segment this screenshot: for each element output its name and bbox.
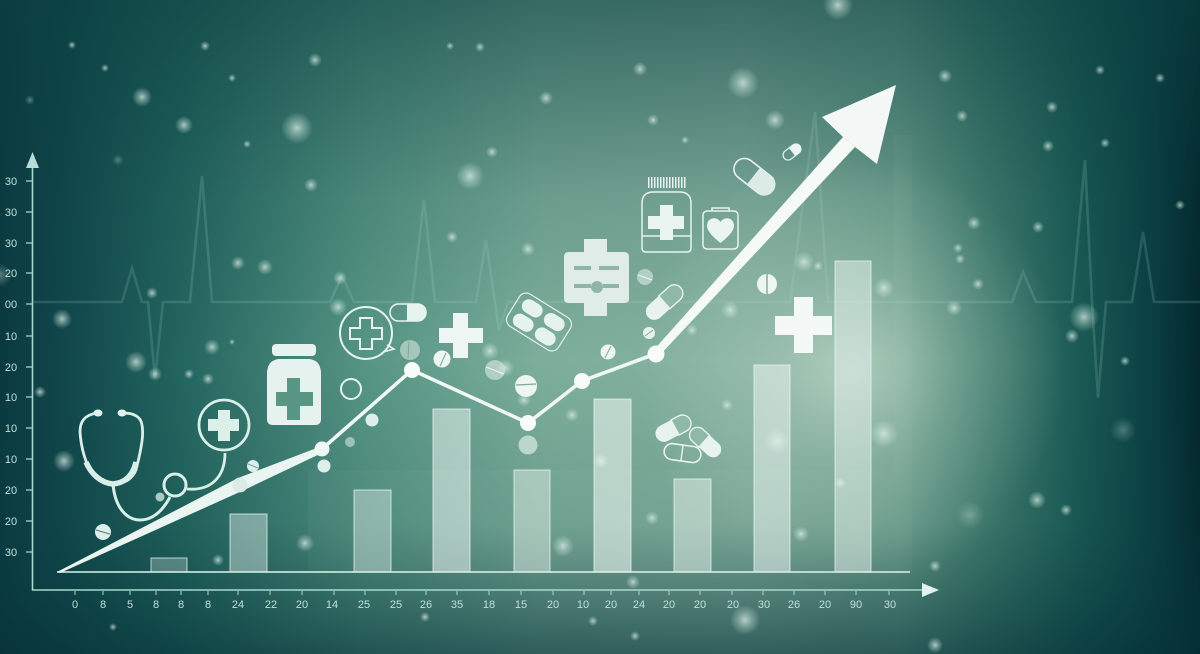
x-axis labels: 25 <box>390 599 402 611</box>
icon: medicine bottle <box>267 344 321 425</box>
x-axis labels: 15 <box>515 599 527 611</box>
icon: pill bottle outline <box>642 182 691 252</box>
y-axis labels: 00 <box>5 299 17 311</box>
x-axis labels: 90 <box>850 599 862 611</box>
x-axis labels <box>72 599 896 611</box>
x-axis labels: 5 <box>127 599 133 611</box>
icon: solid cross <box>439 313 483 358</box>
x-axis labels: 20 <box>547 599 559 611</box>
icon: capsule group <box>652 412 724 464</box>
x-axis labels: 8 <box>178 599 184 611</box>
x-axis labels: 25 <box>358 599 370 611</box>
x-axis labels: 20 <box>296 599 308 611</box>
y-axis labels: 30 <box>5 176 17 188</box>
y-axis labels: 30 <box>5 238 17 250</box>
x-axis labels: 22 <box>265 599 277 611</box>
icon: medical case <box>564 239 629 316</box>
y-axis labels: 20 <box>5 485 17 497</box>
icon: heart case <box>703 208 738 249</box>
x-axis labels: 20 <box>819 599 831 611</box>
x-axis labels: 20 <box>694 599 706 611</box>
icon: speech-bubble cross <box>340 307 394 359</box>
bar chart <box>151 261 871 572</box>
icon: blister pack <box>503 290 575 354</box>
x-axis labels: 14 <box>326 599 338 611</box>
y-axis labels: 30 <box>5 207 17 219</box>
x-axis labels: 20 <box>605 599 617 611</box>
y-axis labels: 10 <box>5 392 17 404</box>
x-axis labels: 30 <box>884 599 896 611</box>
x-axis labels: 8 <box>100 599 106 611</box>
x-axis labels: 18 <box>483 599 495 611</box>
icon: small pills along the line <box>95 379 378 540</box>
icon: capsules top right <box>730 142 803 199</box>
icon: capsule diagonal small <box>642 281 686 323</box>
icon: white cross <box>775 297 832 353</box>
backdrop panel behind the bars <box>308 135 912 572</box>
y-axis labels <box>5 176 17 559</box>
x-axis labels: 10 <box>577 599 589 611</box>
y-axis labels: 20 <box>5 516 17 528</box>
y-axis labels: 20 <box>5 362 17 374</box>
x-axis labels: 30 <box>758 599 770 611</box>
x-axis labels: 0 <box>72 599 78 611</box>
x-axis labels: 26 <box>788 599 800 611</box>
y-axis labels: 10 <box>5 331 17 343</box>
x-axis labels: 8 <box>153 599 159 611</box>
chart axes <box>26 152 939 597</box>
y-axis labels: 30 <box>5 547 17 559</box>
icon: stethoscope <box>80 400 249 520</box>
x-axis labels: 20 <box>727 599 739 611</box>
x-axis labels: 20 <box>663 599 675 611</box>
x-axis labels: 24 <box>232 599 244 611</box>
x-axis labels: 8 <box>205 599 211 611</box>
icon: round tablets <box>400 269 777 454</box>
icon: capsule <box>390 304 426 321</box>
y-axis labels: 10 <box>5 454 17 466</box>
y-axis labels: 20 <box>5 268 17 280</box>
x-axis labels: 35 <box>451 599 463 611</box>
x-axis labels: 24 <box>633 599 645 611</box>
y-axis labels: 10 <box>5 423 17 435</box>
trend line with rising arrow <box>57 85 896 573</box>
ECG heartbeat line <box>34 112 1200 398</box>
x-axis labels: 26 <box>420 599 432 611</box>
